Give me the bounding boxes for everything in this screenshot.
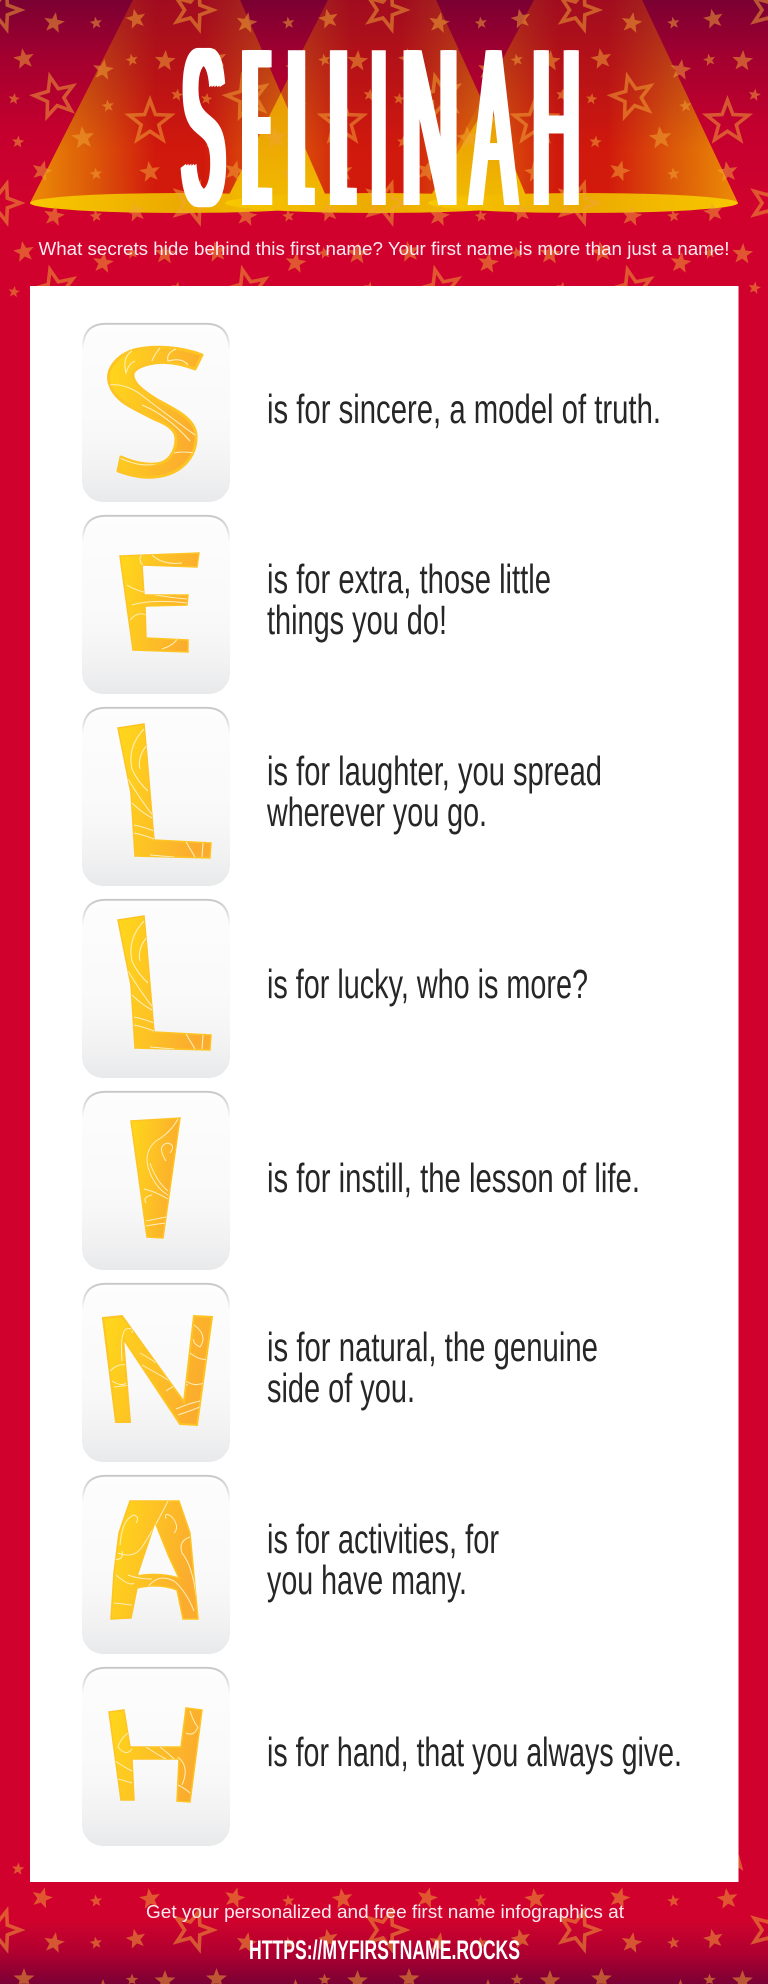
row: L <box>82 707 602 886</box>
text: E: things you do! <box>267 597 447 643</box>
footer url: HTTPS://MYFIRSTNAME.ROCKS <box>249 1935 520 1965</box>
tile: letter S <box>82 323 230 502</box>
left cone <box>30 0 329 203</box>
text: A: you have many. <box>267 1557 467 1603</box>
title: L <box>335 0 350 252</box>
text: N: side of you. <box>267 1365 415 1411</box>
text: E <box>267 556 551 643</box>
row: A <box>82 1475 499 1654</box>
footer line: Get your personalized and free first name infographics at <box>146 1901 624 1922</box>
row: S <box>82 323 661 502</box>
tile: letter E <box>82 515 230 694</box>
row: second L <box>82 899 588 1078</box>
right cone <box>427 0 738 203</box>
row: N <box>82 1283 598 1462</box>
text: N <box>267 1324 598 1411</box>
text: N: is for natural, the genuine <box>267 1324 598 1370</box>
text: L: wherever you go. <box>266 789 487 835</box>
spotlight cones <box>30 0 738 213</box>
tile: letter L <box>82 707 230 886</box>
text: second L: is for lucky, who is more? <box>267 961 588 1007</box>
title: I <box>358 0 400 252</box>
title: S <box>183 0 224 252</box>
title <box>180 0 580 252</box>
title: H <box>533 0 580 252</box>
tile: letter I <box>82 1091 230 1270</box>
subtitle: What secrets hide behind this first name? Your first name is more than just a name! <box>38 238 730 259</box>
spotlight floor ellipses <box>30 193 738 213</box>
text: E: is for extra, those little <box>267 556 551 602</box>
tile: second letter L <box>82 899 230 1078</box>
title: N <box>402 0 458 252</box>
row: H <box>82 1667 682 1846</box>
row: E <box>82 515 551 694</box>
title: A <box>472 0 515 252</box>
text: A <box>267 1516 499 1603</box>
text: A: is for activities, for <box>267 1516 499 1562</box>
star pattern top <box>0 0 768 298</box>
title: E <box>246 0 267 252</box>
tile: letter A <box>82 1475 230 1654</box>
text: L <box>266 748 602 835</box>
white panel <box>30 286 738 1882</box>
text: L: is for laughter, you spread <box>267 748 602 794</box>
tile: letter N <box>82 1283 230 1462</box>
tile: letter H <box>82 1667 230 1846</box>
star pattern bottom <box>0 1855 768 1984</box>
middle cone <box>225 0 529 203</box>
row: I <box>82 1091 640 1270</box>
title: L <box>293 0 308 252</box>
